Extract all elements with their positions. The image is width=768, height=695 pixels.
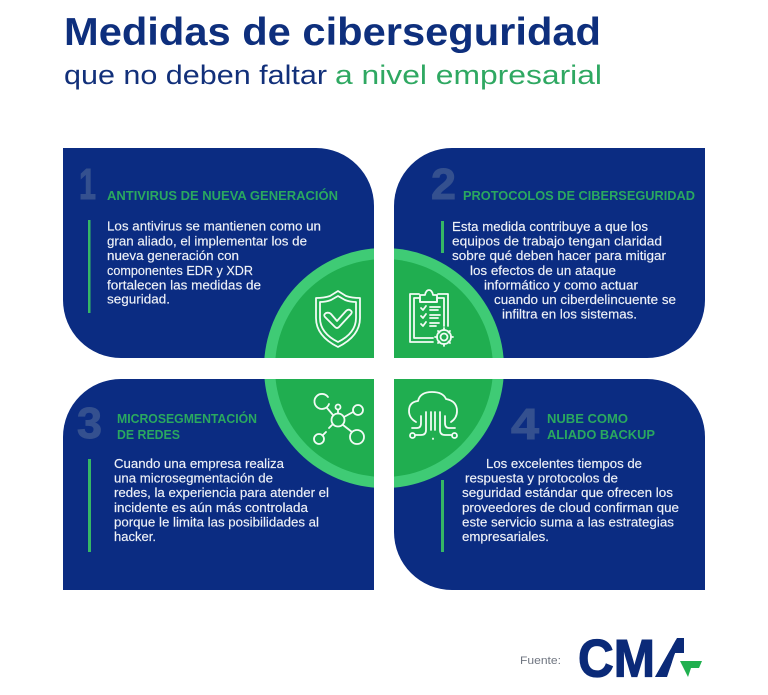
icon: cloud [409, 392, 457, 439]
body text: Cuando una empresa realiza [114, 456, 285, 471]
number 4: 4 [511, 400, 540, 449]
body text: hacker. [114, 529, 156, 544]
body text: fortalecen las medidas de [107, 278, 261, 292]
heading: nube: NUBE COMO [547, 411, 628, 426]
body text: informático y como actuar [484, 277, 639, 292]
number 3: 3 [77, 399, 102, 448]
body text: una microsegmentación de [114, 471, 273, 486]
panel: microsegmentación [63, 379, 374, 590]
title: Medidas de ciberseguridad [64, 11, 601, 54]
heading: nube [547, 411, 655, 442]
body text: equipos de trabajo tengan claridad [452, 234, 662, 249]
heading: microsegmentación: MICROSEGMENTACIÓN [117, 411, 257, 426]
panel: antivirus [63, 148, 374, 358]
body text: seguridad. [107, 292, 170, 306]
heading: microsegmentación: DE REDES [117, 427, 180, 442]
accent bar [88, 220, 90, 313]
body text [114, 456, 329, 544]
body text: gran aliado, el implementar los de [107, 234, 307, 248]
heading: nube: ALIADO BACKUP [547, 427, 655, 442]
panel: protocolos [394, 148, 705, 358]
body text: redes, la experiencia para atender el [114, 485, 329, 500]
panel: nube [394, 379, 705, 590]
body text: respuesta y protocolos de [465, 471, 618, 486]
body text: componentes EDR y XDR [107, 263, 253, 278]
accent bar [441, 480, 444, 552]
body text: seguridad estándar que ofrecen los [462, 485, 674, 500]
body text: cuando un ciberdelincuente se [494, 292, 676, 307]
accent bar [88, 459, 91, 552]
number 1: 1 [79, 160, 96, 209]
body text: este servicio suma a las estrategias [462, 514, 675, 529]
body text: incidente es aún más controlada [114, 500, 309, 515]
logo: CMA: CM [578, 630, 655, 688]
accent bar [441, 221, 444, 253]
body text: empresariales. [462, 529, 549, 544]
number 2: 2 [431, 160, 456, 209]
body text: Los excelentes tiempos de [486, 456, 642, 471]
icon: shield [316, 291, 360, 347]
body text: sobre qué deben hacer para mitigar [452, 248, 667, 263]
body text [462, 456, 679, 544]
heading: microsegmentación [117, 411, 257, 442]
heading: antivirus: ANTIVIRUS DE NUEVA GENERACIÓN [107, 188, 338, 203]
body text: Esta medida contribuye a que los [452, 219, 649, 234]
body text: Los antivirus se mantienen como un [107, 218, 321, 234]
logo: CMA [579, 638, 702, 678]
title: a nivel empresarial [335, 60, 602, 90]
body text: los efectos de un ataque [470, 263, 616, 278]
icon: clipboard [410, 290, 453, 346]
central green circle [256, 240, 512, 496]
body text: nueva generación con [107, 248, 239, 263]
title [64, 11, 602, 90]
body text: infiltra en los sistemas. [502, 307, 637, 322]
title: que no deben faltar [64, 60, 327, 90]
body text: porque le limita las posibilidades al [114, 514, 319, 529]
body text [107, 218, 321, 306]
icon: network [314, 394, 364, 444]
source label: Fuente: [520, 655, 561, 667]
heading: protocolos: PROTOCOLOS DE CIBERSEGURIDAD [463, 188, 695, 203]
body text [452, 219, 676, 322]
body text: proveedores de cloud confirman que [462, 500, 679, 515]
logo: CMA: A [652, 629, 691, 689]
